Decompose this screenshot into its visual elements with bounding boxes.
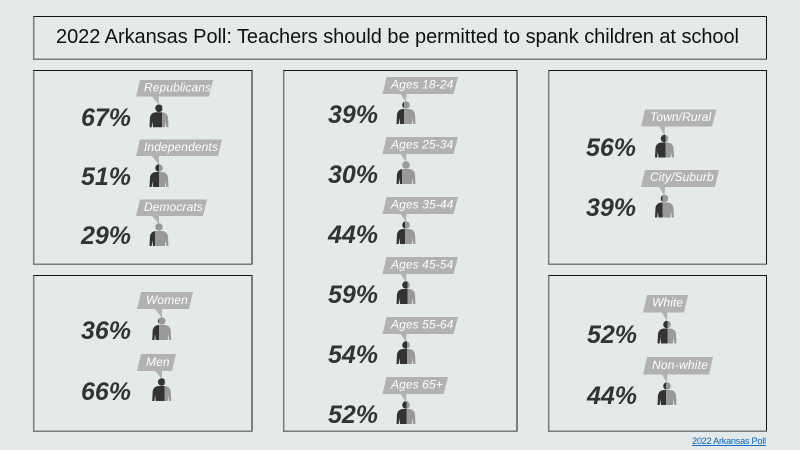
Ages 55-64 54% — [328, 317, 458, 369]
City/Suburb 39%: City/Suburb — [650, 170, 714, 184]
Independents 51% — [81, 140, 222, 191]
Republicans 67%: Republicans — [144, 80, 211, 94]
Ages 35-44 44%: 44% — [327, 221, 378, 249]
panel: gender — [34, 276, 252, 431]
White 52%: 52% — [587, 321, 637, 349]
Non-white 44%: 44% — [586, 382, 637, 410]
Ages 35-44 44%: Ages 35-44 — [390, 198, 454, 212]
Ages 45-54 59%: Ages 45-54 — [390, 258, 454, 272]
Ages 65+ 52%: Ages 65+ — [390, 378, 443, 392]
Women 36%: 36% — [81, 317, 131, 345]
panel: area — [548, 70, 766, 264]
Republicans 67%: 67% — [81, 104, 131, 132]
Men 66%: 66% — [81, 378, 131, 406]
Republicans 67% — [81, 80, 213, 132]
Independents 51%: Independents — [144, 140, 218, 154]
Ages 55-64 54%: 54% — [328, 341, 378, 369]
Ages 18-24 39%: Ages 18-24 — [390, 78, 454, 92]
Town/Rural 56% — [586, 110, 716, 162]
Ages 35-44 44% — [327, 197, 458, 249]
Non-white 44% — [586, 357, 713, 410]
Non-white 44%: Non-white — [652, 358, 708, 372]
Town/Rural 56%: 56% — [586, 134, 636, 162]
title — [34, 16, 766, 59]
Ages 65+ 52%: 52% — [328, 401, 378, 429]
White 52%: White — [652, 296, 683, 310]
title: 2022 Arkansas Poll: Teachers should be permitted to spank children at school — [56, 26, 739, 48]
panel: age — [284, 70, 517, 431]
Ages 45-54 59% — [328, 257, 458, 309]
panel: party — [34, 70, 252, 264]
Ages 18-24 39% — [328, 77, 458, 129]
White 52% — [587, 295, 688, 349]
City/Suburb 39% — [586, 170, 719, 222]
Independents 51%: 51% — [81, 163, 131, 191]
source link: 2022 Arkansas Poll — [692, 436, 766, 446]
Women 36% — [81, 292, 193, 345]
Ages 25-34 30% — [328, 137, 458, 189]
panel: race — [548, 276, 766, 431]
Ages 25-34 30%: Ages 25-34 — [390, 138, 454, 152]
Democrats 29%: Democrats — [144, 200, 203, 214]
Democrats 29% — [80, 200, 207, 250]
Ages 65+ 52% — [328, 377, 448, 429]
Ages 45-54 59%: 59% — [328, 281, 378, 309]
Ages 25-34 30%: 30% — [328, 161, 378, 189]
Ages 18-24 39%: 39% — [328, 101, 378, 129]
City/Suburb 39%: 39% — [586, 194, 636, 222]
Democrats 29%: 29% — [80, 222, 131, 250]
Town/Rural 56%: Town/Rural — [650, 110, 711, 124]
Women 36%: Women — [146, 293, 188, 307]
Ages 55-64 54%: Ages 55-64 — [390, 318, 454, 332]
Men 66% — [81, 354, 176, 406]
Men 66%: Men — [146, 355, 170, 369]
